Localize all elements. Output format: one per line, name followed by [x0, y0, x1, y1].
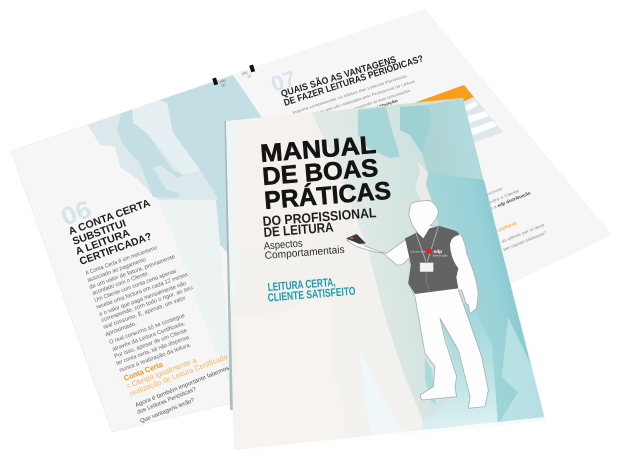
heading: conta certa: [67, 197, 153, 268]
edp logo: [411, 249, 448, 258]
section number 07: 07: [268, 65, 299, 97]
subtitle: DO PROFISSIONAL: [262, 205, 377, 229]
orange table header: [400, 85, 474, 112]
orange callout: realização de Leitura Certificada: [128, 352, 229, 398]
page number marker right: [241, 65, 255, 79]
teal water shapes on left page: [88, 70, 270, 385]
page number marker right: 07: [247, 74, 252, 79]
lanyard: [416, 227, 438, 262]
heading: conta certa: A LEITURA: [74, 227, 132, 258]
closing question text: dos Leituras Periódicas?: [137, 386, 198, 416]
title: MANUAL: [259, 131, 377, 168]
orange callout: Conta Certa: [122, 360, 165, 383]
body text lower right: tem causas estimados?: [503, 230, 548, 252]
body text left: nunca a realização da leitura.: [119, 342, 192, 374]
body text top right: ajudam o Cliente a compreender as suas comunicações: [319, 88, 411, 122]
body text top right: [292, 73, 416, 122]
body text left: Um Cliente com conta certa apenas: [94, 268, 178, 304]
handheld device: [346, 234, 366, 244]
slogan: CLIENTE SATISFEITO: [267, 286, 356, 304]
body text left: corresponde, com todo o rigor, ao seu: [101, 285, 194, 324]
page number marker left: pág: [219, 78, 226, 84]
panel: right page of open leaflet: [233, 9, 612, 285]
heading: conta certa: SUBSTITUI: [71, 217, 128, 248]
body text left: e o valor que paga mensalmente não: [99, 281, 187, 318]
illustration: meter reader figure: [346, 201, 488, 408]
body text lower right: [483, 186, 548, 252]
edp logo: edp: [433, 249, 442, 255]
panel: left page of open leaflet: [11, 70, 270, 432]
body text left: acordado com o Cliente.: [92, 271, 150, 297]
closing question text: Que vantagens terão?: [140, 397, 196, 425]
cover shadow: [224, 121, 233, 410]
body silhouette: [347, 201, 488, 408]
light blue table: [440, 97, 503, 143]
heading: conta certa: A CONTA CERTA: [67, 197, 152, 238]
body text left: Por isso, apesar de um Cliente: [114, 328, 188, 360]
background water shapes: [226, 118, 261, 242]
heading: vantagens: QUAIS SÃO AS VANTAGENS: [279, 53, 397, 99]
slogan: [267, 277, 356, 304]
page number marker left: [212, 78, 226, 88]
title: DE BOAS: [261, 154, 379, 191]
closing question text: [135, 365, 230, 425]
closing question text: Agora é também importante falarmos: [135, 365, 230, 409]
body text left: associado ao pagamento: [87, 257, 147, 284]
body text left: recebe uma factura em cada 12 meses: [96, 272, 189, 311]
body text left: A Conta Certa é um mecanismo: [85, 245, 158, 277]
page number marker right: pág: [241, 70, 248, 76]
subtitle: [262, 205, 377, 240]
orange callout: = Obriga igualmente a: [124, 355, 198, 391]
section number 06: 06: [57, 195, 95, 232]
subtitle: DE LEITURA: [263, 220, 334, 240]
body text left: aproximado.: [105, 321, 138, 338]
body text lower right: do cliente por si deve: [501, 222, 546, 244]
body text left: através da Leitura Certificada.: [112, 321, 186, 353]
aspectos comportamentais: Comportamentais: [264, 244, 345, 262]
body text left: ter conta certa, tal não dispensa: [116, 335, 191, 367]
slogan: LEITURA CERTA,: [267, 277, 336, 294]
body text left: real consumo. É, apenas, um valor: [102, 295, 187, 331]
heading: vantagens: DE FAZER LEITURAS PERIÓDICAS?: [282, 52, 425, 108]
edp logo: Leitura certa: [411, 250, 426, 254]
body text lower right: confiante: [497, 220, 518, 234]
panel: booklet cover: [226, 98, 560, 455]
body text top right: em especial as que são realizadas pelo Profissional de Leitura: [295, 78, 416, 122]
body text left: de um valor de fatura, previamente: [89, 254, 176, 291]
body text left: [85, 245, 194, 374]
body text lower right: entre o Cliente: [488, 188, 520, 205]
aspectos comportamentais: Aspectos: [263, 237, 303, 252]
body text lower right: e a edp distribuição: [490, 190, 532, 211]
heading: conta certa: CERTIFICADA?: [78, 231, 153, 268]
edp logo: distribuição: [433, 254, 448, 258]
body text top right: Importa compreender os efeitos das Leituras Periódicas: [292, 73, 407, 115]
title: PRÁTICAS: [263, 176, 392, 215]
page number marker left: 06: [221, 83, 226, 88]
vest: [405, 226, 459, 294]
title: [259, 131, 392, 215]
badge: [420, 263, 433, 272]
body text top right: edp distribuição: [359, 98, 399, 115]
body text left: O real consumo só se consegue: [109, 313, 186, 346]
body text lower right: fornecimento: [483, 186, 503, 198]
